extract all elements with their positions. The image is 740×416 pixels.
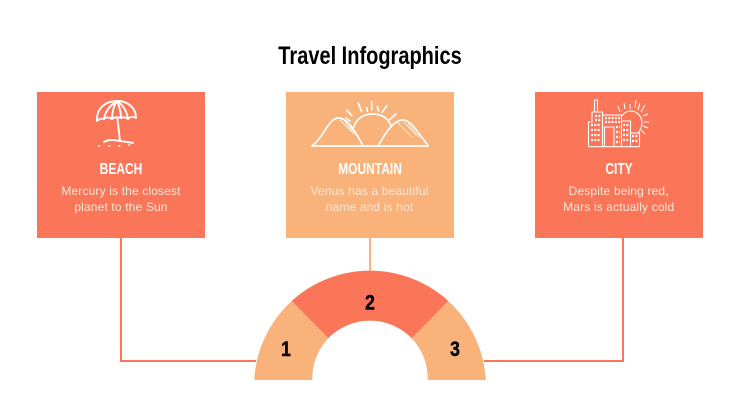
- text: mountain: name and is hot: [326, 200, 413, 214]
- heading: city: CITY: [605, 161, 632, 178]
- icon: mountains and sun: [311, 100, 429, 147]
- text: mountain: [310, 184, 428, 214]
- text: beach: Mercury is the closest: [61, 184, 181, 198]
- text: beach: planet to the Sun: [74, 200, 168, 214]
- text: city: Despite being red,: [569, 184, 669, 198]
- panel: mountain: [286, 92, 454, 238]
- connector lines and semicircle chart: 3: [450, 338, 460, 361]
- panel: city: [535, 92, 703, 238]
- icon: city and sun: [588, 100, 649, 148]
- panel: beach: [37, 92, 205, 238]
- connector lines and semicircle chart: 2: [365, 291, 375, 315]
- icon: beach umbrella: [96, 100, 137, 147]
- heading: mountain: MOUNTAIN: [338, 161, 401, 178]
- text: beach: [61, 184, 181, 214]
- text: mountain: Venus has a beautiful: [311, 184, 428, 198]
- heading: beach: BEACH: [100, 161, 142, 178]
- title: Travel Infographics: [278, 42, 462, 70]
- text: city: Mars is actually cold: [563, 200, 674, 214]
- connector lines and semicircle chart: 1: [281, 338, 291, 361]
- text: city: [563, 184, 674, 214]
